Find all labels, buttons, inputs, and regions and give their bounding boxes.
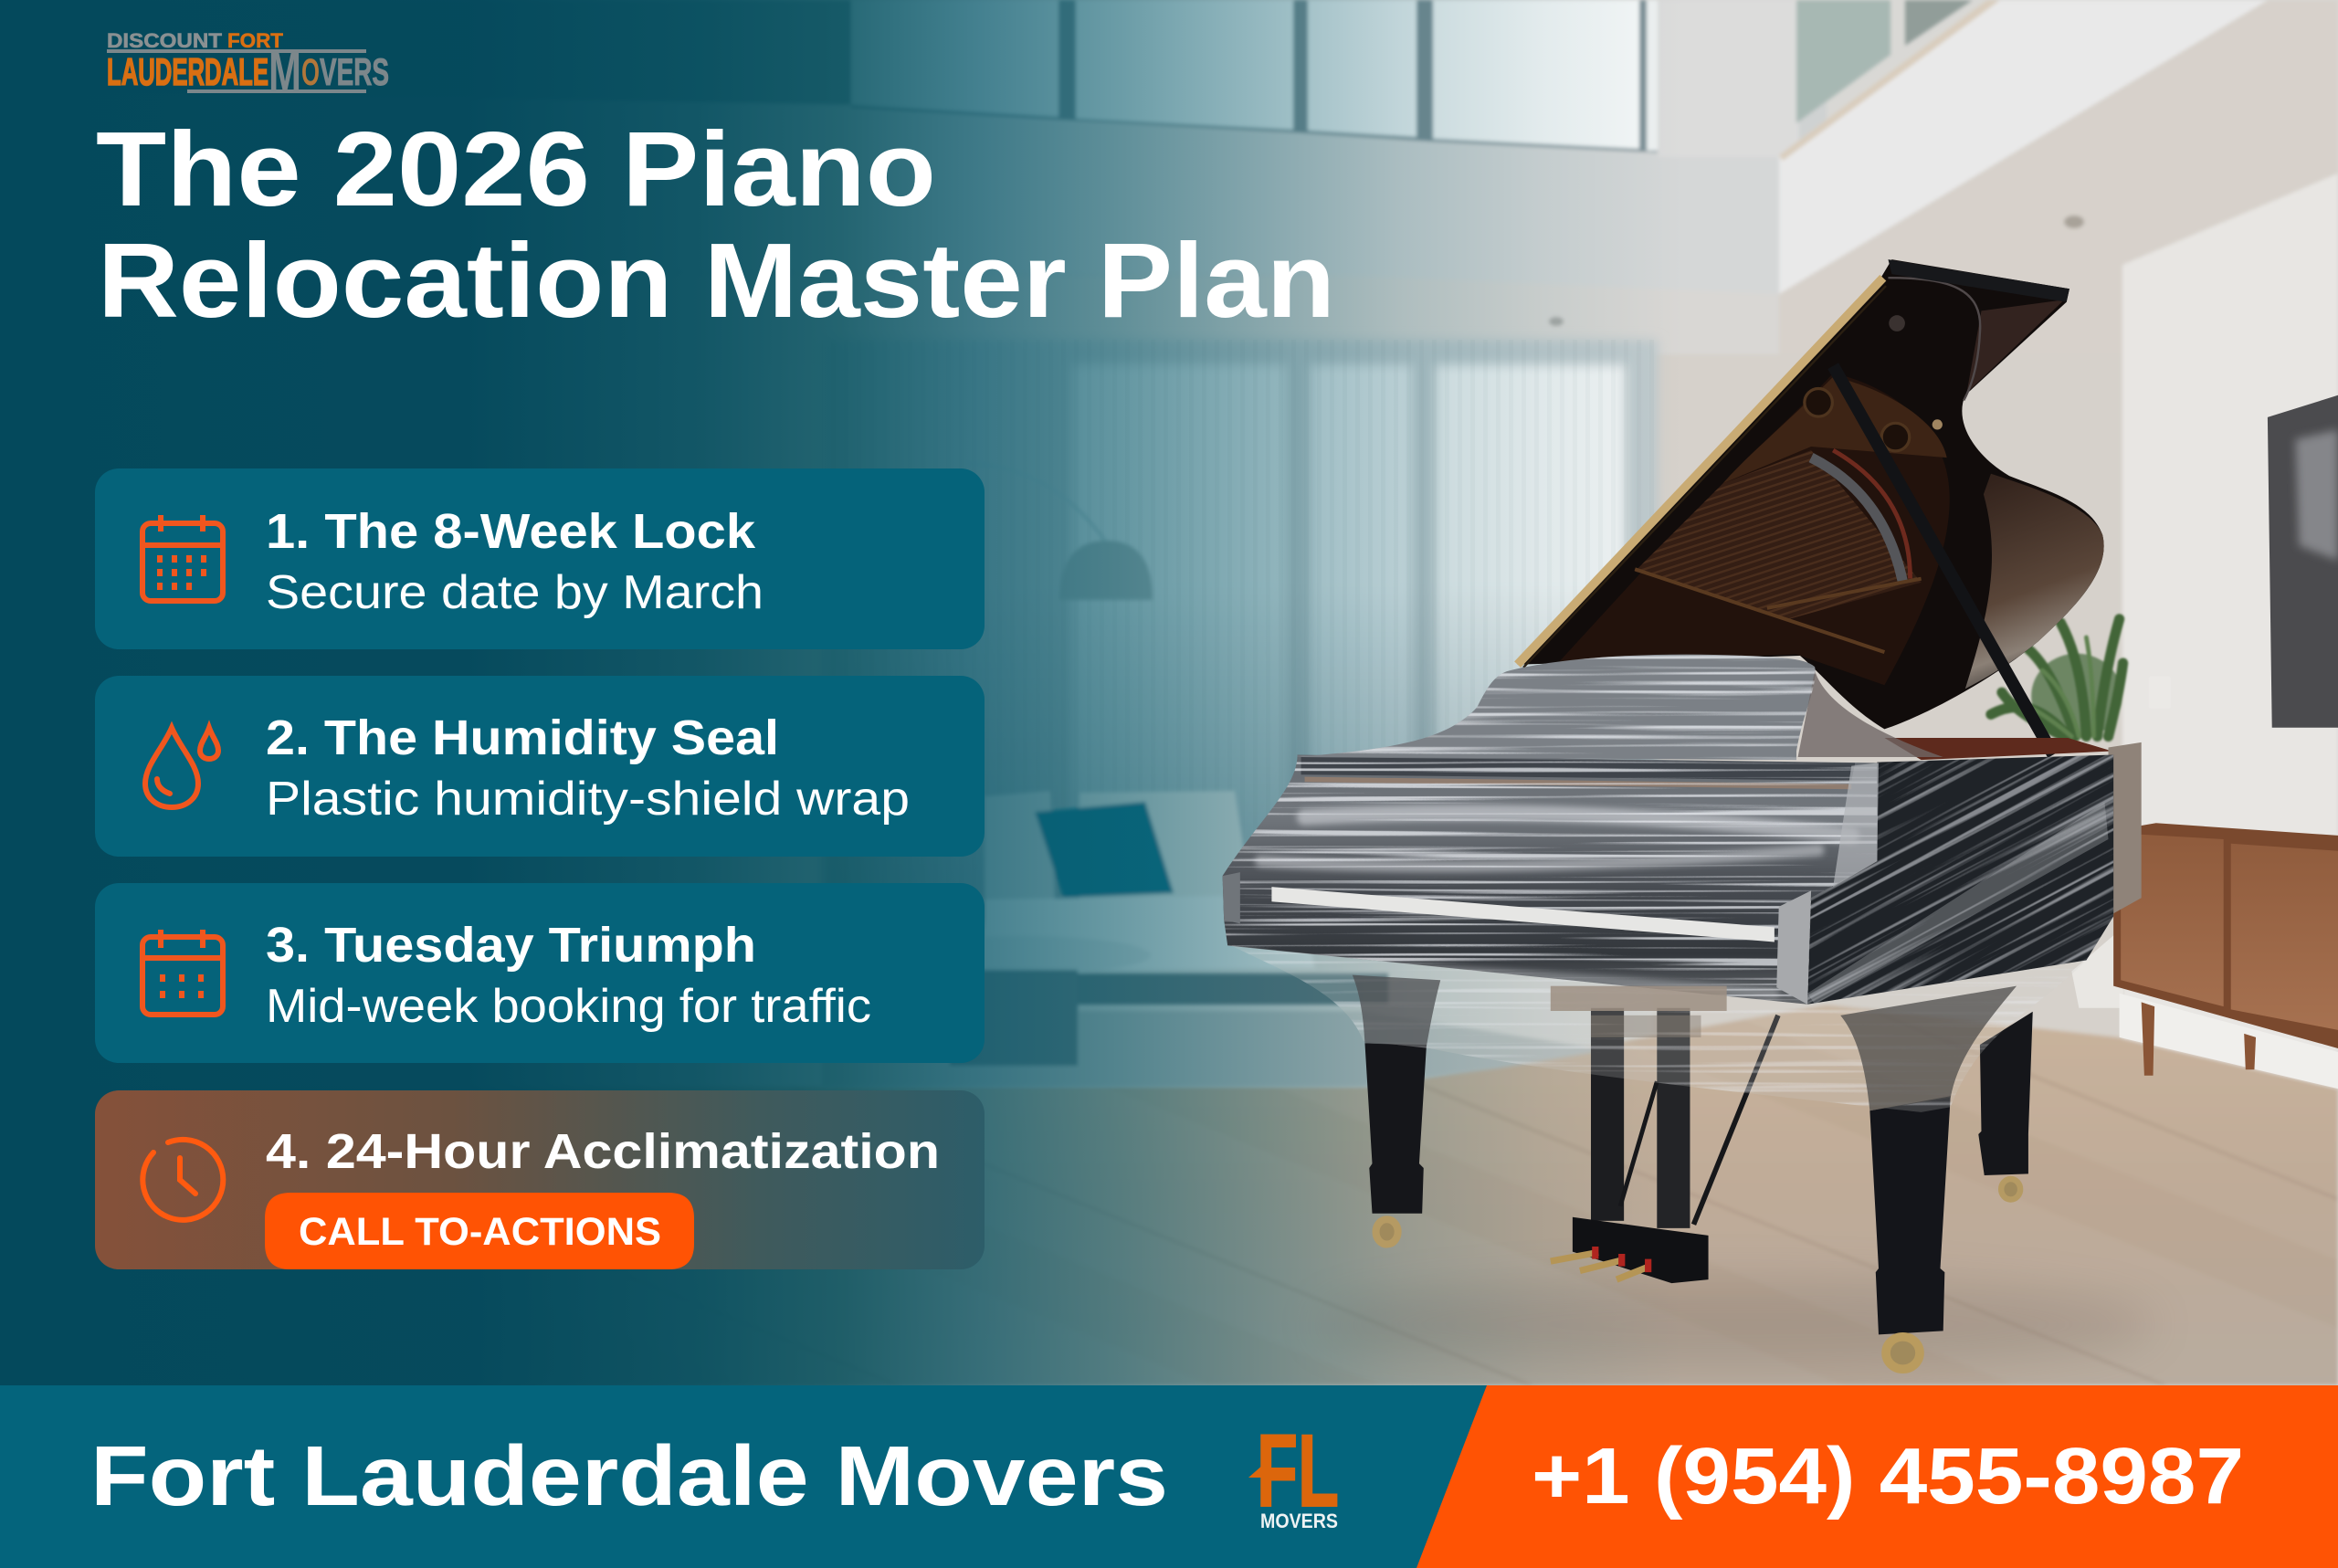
- footer: orange phone panel: [1416, 1385, 2338, 1568]
- icon: clock: [142, 1140, 223, 1220]
- planter: [2071, 927, 2123, 1008]
- title: Relocation Master Plan: [98, 221, 1335, 340]
- icon: water drops: [145, 728, 218, 807]
- footer bar: [0, 1385, 2338, 1568]
- right ceiling: [1653, 0, 2338, 365]
- wall switch: [2149, 677, 2171, 709]
- sofa: [985, 791, 1388, 1005]
- balcony: [1779, 0, 2268, 294]
- piano wrapped body: [1222, 654, 2113, 1005]
- footer: company name: Fort Lauderdale Movers: [90, 1428, 1168, 1523]
- piano front right leg: [1869, 1096, 1951, 1369]
- panel: step 1: [95, 468, 985, 649]
- floor lamp: [968, 464, 1153, 600]
- logo: Discount Fort Lauderdale Movers: VERS: [320, 50, 389, 93]
- button: call to-actions: CALL TO-ACTIONS: [299, 1210, 661, 1254]
- recessed lights: [2064, 216, 2084, 228]
- panel: step 4: [95, 1090, 985, 1269]
- step 2 description: Plastic humidity-shield wrap: [266, 773, 910, 826]
- logo: Discount Fort Lauderdale Movers: O: [301, 50, 320, 93]
- panel: step 2: [95, 676, 985, 857]
- upper wall and clerestory windows: [0, 0, 1827, 310]
- wooden cabinet: [2113, 823, 2338, 1076]
- logo: Discount Fort Lauderdale Movers: FORT: [227, 29, 284, 52]
- plant: [1991, 619, 2123, 739]
- rug: [822, 1011, 1607, 1087]
- back wall: [1653, 354, 2128, 1085]
- icon: calendar: [142, 930, 223, 1015]
- coffee table: [895, 936, 1151, 1066]
- piano interior soundboard: [1558, 315, 1950, 685]
- floor shadow under piano: [1315, 1279, 2155, 1370]
- far side of rim: [2109, 742, 2142, 916]
- piano back leg: [1978, 1012, 2033, 1200]
- floor: [0, 1005, 2338, 1385]
- panel: step 3: [95, 883, 985, 1063]
- step 1 description: Secure date by March: [266, 566, 764, 619]
- mahogany rim: [1884, 738, 2112, 760]
- title: [96, 110, 1335, 340]
- upper-level window: [1796, 0, 1890, 123]
- step 3 description: Mid-week booking for traffic: [266, 980, 871, 1033]
- photo: piano and right-side furniture: [1187, 259, 2338, 1369]
- piano lid: [1518, 259, 2104, 729]
- footer: phone number: +1 (954) 455-8987: [1532, 1432, 2244, 1521]
- logo: Discount Fort Lauderdale Movers: DISCOUNT: [107, 29, 223, 52]
- right wall: [2122, 174, 2338, 1096]
- step 1 heading: 1. The 8-Week Lock: [266, 504, 756, 559]
- footer: FL Movers logo: MOVERS: [1260, 1510, 1338, 1532]
- title: The 2026 Piano: [96, 110, 936, 228]
- step 4 heading: 4. 24-Hour Acclimatization: [266, 1124, 940, 1179]
- logo: Discount Fort Lauderdale Movers: LAUDERDALE: [107, 50, 269, 93]
- television: [2268, 395, 2338, 728]
- wrapped music desk: [1300, 654, 1943, 760]
- icon: calendar: [142, 515, 223, 601]
- curtains: [822, 340, 1658, 931]
- logo: Discount Fort Lauderdale Movers: [107, 29, 389, 104]
- step 3 heading: 3. Tuesday Triumph: [266, 918, 756, 973]
- footer: FL Movers logo: [1248, 1414, 1339, 1532]
- logo: Discount Fort Lauderdale Movers: M: [269, 41, 301, 104]
- plastic skirt: [1231, 946, 2086, 1112]
- baseboard: [2120, 994, 2338, 1089]
- lid prop stick: [1833, 366, 2053, 755]
- button: call to-actions: [265, 1193, 694, 1269]
- footer: FL Movers logo: FL: [1257, 1414, 1339, 1528]
- step 2 heading: 2. The Humidity Seal: [266, 710, 779, 765]
- pedal lyre: [1551, 1008, 1778, 1283]
- piano left leg: [1364, 1043, 1427, 1245]
